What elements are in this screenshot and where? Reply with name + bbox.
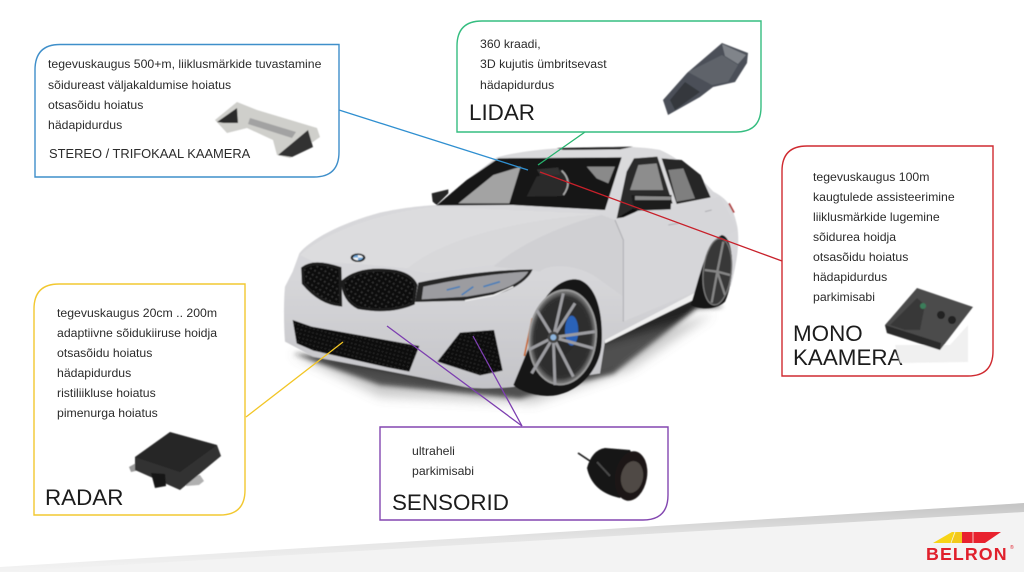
footer band (0, 503, 1024, 572)
tail light (729, 203, 734, 213)
icon: parking sensor (578, 448, 651, 503)
logo: Belron (926, 532, 1014, 564)
panel text: sensor features: ultraheli (412, 444, 455, 458)
panel text: radar features: ristiliikluse hoiatus (57, 386, 156, 400)
icon: radar module (129, 432, 221, 490)
door details (615, 210, 712, 322)
grille (303, 264, 416, 310)
connector: stereo camera (339, 110, 528, 170)
panel text: radar features: tegevuskaugus 20cm .. 200m (57, 306, 217, 320)
panel text: stereo camera features: hädapidurdus (48, 118, 122, 132)
side windows (617, 157, 711, 218)
heading: lidar: LIDAR (469, 100, 535, 125)
connector: mono camera (540, 172, 782, 261)
connector: radar (246, 342, 343, 417)
panel text: stereo camera features: sõidureast väljakaldumise hoiatus (48, 78, 231, 92)
icon: mono camera module (885, 288, 973, 363)
side intake (437, 330, 503, 375)
front wheel (513, 279, 602, 396)
panel text: radar features: otsasõidu hoiatus (57, 346, 152, 360)
panel: sensors (380, 427, 668, 520)
panel text: mono camera features: tegevuskaugus 100m (813, 170, 929, 184)
panel text: lidar features: 3D kujutis ümbritsevast (480, 57, 607, 71)
icon: stereo camera module (215, 102, 320, 158)
panel text: mono camera features: kaugtulede assisteerimine (813, 190, 955, 204)
panel text: radar features: pimenurga hoiatus (57, 406, 158, 420)
car body (284, 147, 738, 388)
heading: radar: RADAR (45, 485, 123, 510)
heading: mono camera: MONO (793, 321, 863, 346)
orange marker (524, 318, 532, 356)
car illustration (284, 147, 738, 403)
panel text: lidar features: 360 kraadi, (480, 37, 541, 51)
heading: sensors: SENSORID (392, 490, 509, 515)
hood highlight (300, 207, 600, 268)
door mirrors (432, 189, 672, 218)
panel text: mono camera features: parkimisabi (813, 290, 875, 304)
panel text: radar features: adaptiivne sõidukiiruse hoidja (57, 326, 217, 340)
panel text: mono camera features: hädapidurdus (813, 270, 887, 284)
panel: lidar (457, 21, 761, 132)
panel text: mono camera features: sõidurea hoidja (813, 230, 896, 244)
headlight (415, 269, 533, 302)
BMW badge (351, 253, 365, 262)
panel text: mono camera features: otsasõidu hoiatus (813, 250, 908, 264)
lower intake (293, 320, 419, 372)
windshield (437, 157, 622, 210)
logo registered mark: ® (1010, 544, 1014, 551)
panel text: lidar features: hädapidurdus (480, 78, 554, 92)
connector: lidar (538, 132, 585, 165)
heading: mono camera: KAAMERA (793, 345, 903, 370)
roof strip (557, 147, 633, 150)
panel text: radar features: hädapidurdus (57, 366, 131, 380)
panel text: mono camera features: liiklusmärkide lugemine (813, 210, 940, 224)
connectors: sensors (387, 326, 522, 426)
panel: stereo / trifocal camera (35, 44, 339, 177)
logo wordmark: BELRON (926, 544, 1008, 564)
panel: radar (34, 284, 245, 515)
heading: stereo camera: STEREO / TRIFOKAAL KAAMERA (49, 146, 251, 161)
panel: mono camera (782, 146, 993, 376)
logo mark (933, 532, 1001, 543)
panel text: sensor features: parkimisabi (412, 464, 474, 478)
panel text: stereo camera features: tegevuskaugus 500+m, liiklusmärkide tuvastamine (48, 57, 322, 71)
panel text: stereo camera features: otsasõidu hoiatus (48, 98, 143, 112)
rear wheel (691, 235, 735, 308)
icon: lidar module (663, 43, 748, 115)
